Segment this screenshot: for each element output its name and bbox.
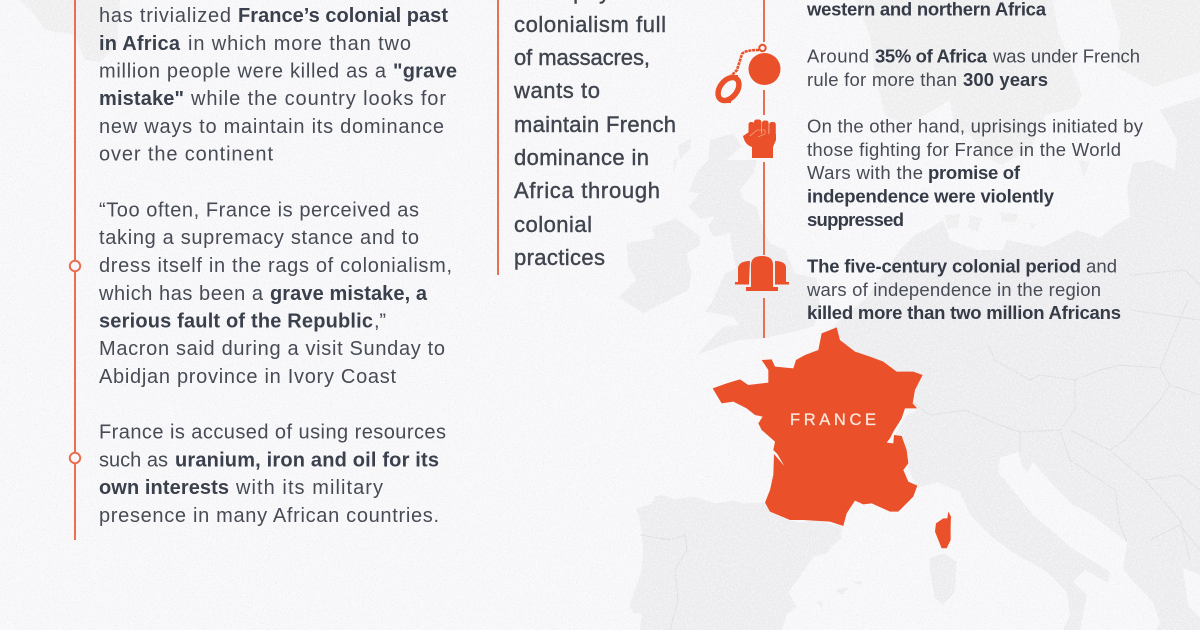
text block: death toll: wars of independence in the region xyxy=(806,279,1101,300)
text block: Macron trivialized colonial past: while the country looks for xyxy=(190,88,446,110)
text block: 35% of Africa: 35% of Africa xyxy=(875,46,988,66)
text block: death toll: killed more than two million Africans xyxy=(807,302,1121,323)
land: Great Britain xyxy=(688,133,820,355)
text block: suppressed uprisings: suppressed xyxy=(807,209,904,230)
text block: Macron trivialized colonial past: has trivialized xyxy=(99,5,231,27)
text block: Macron quote: taking a supremacy stance and to xyxy=(99,227,419,249)
text block: middle column statement: colonialism full xyxy=(514,12,666,37)
text block: Macron trivialized colonial past: in which more than two xyxy=(188,33,411,55)
land: Hebrides xyxy=(673,138,692,173)
text block: Macron quote: serious fault of the Republic xyxy=(99,310,373,332)
text block: Macron trivialized colonial past xyxy=(99,5,457,166)
land: Finland xyxy=(1110,0,1200,87)
timeline node xyxy=(70,453,80,463)
text block: suppressed uprisings xyxy=(807,116,1144,230)
text block: middle column statement: maintain French xyxy=(514,112,676,137)
text block: Macron quote: dress itself in the rags of colonialism, xyxy=(99,255,452,277)
text block: Macron trivialized colonial past: mistake" xyxy=(99,88,184,110)
text block: 35% of Africa: rule for more than xyxy=(807,69,957,90)
text block: suppressed uprisings: those fighting for France in the World xyxy=(807,139,1121,160)
timeline node xyxy=(70,261,80,271)
text block: Macron quote: which has been a xyxy=(98,283,264,305)
map: France highlighted xyxy=(713,327,951,548)
text block: middle column statement: of massacres, xyxy=(514,45,650,70)
text block: middle column statement: practices xyxy=(514,245,605,270)
text block: death toll: The five-century colonial period xyxy=(807,256,1081,276)
Lake Geneva and Swiss border gap xyxy=(885,407,918,444)
text block: resources and military presence: with its military xyxy=(235,477,383,499)
text block: Macron quote: “Too often, France is perceived as xyxy=(99,200,419,222)
text block: resources and military presence: uranium, iron and oil for its xyxy=(175,450,439,472)
text block: suppressed uprisings: independence were violently xyxy=(807,186,1055,206)
text block: 35% of Africa xyxy=(807,46,1140,90)
text block: middle column statement: Africa through xyxy=(514,178,660,203)
land: top-left landmass xyxy=(20,0,120,62)
text block: Macron trivialized colonial past: in Africa xyxy=(99,33,181,55)
text block: Macron quote: ,” xyxy=(374,310,386,332)
land: Iberia xyxy=(629,495,842,630)
text block: death toll xyxy=(806,256,1121,323)
map: Corsica xyxy=(935,512,951,548)
text block: Macron trivialized colonial past: new ways to maintain its dominance xyxy=(99,116,444,138)
text block: resources and military presence: France is accused of using resources xyxy=(99,422,446,444)
timeline: left column xyxy=(70,0,80,540)
text block: Macron quote xyxy=(98,200,452,388)
Aegean sea xyxy=(1183,568,1200,618)
timeline: right column segments xyxy=(763,0,765,338)
text block: Macron trivialized colonial past: over the continent xyxy=(99,144,273,166)
text block: middle column statement xyxy=(513,0,676,270)
text block: middle column statement: colonial xyxy=(514,212,592,237)
text block: 35% of Africa: was under French xyxy=(992,46,1140,66)
land: continental Europe xyxy=(833,97,1200,630)
icon: ball and chain xyxy=(714,45,780,104)
land: Ireland xyxy=(618,218,700,313)
text block: Macron quote: grave mistake, a xyxy=(270,283,428,305)
text block: resources and military presence: presence in many African countries. xyxy=(99,505,439,527)
text block: Macron trivialized colonial past: "grave xyxy=(393,60,457,82)
text block: middle column statement: wants to xyxy=(513,78,600,103)
land: Balearic islands xyxy=(817,582,862,608)
timeline: middle column xyxy=(497,0,499,275)
text block: Macron trivialized colonial past: million people were killed as a xyxy=(99,60,387,82)
text block: suppressed uprisings: promise of xyxy=(928,162,1021,183)
text block: Macron quote: Abidjan province in Ivory Coast xyxy=(99,366,396,388)
text block: middle column statement: dominance in xyxy=(514,145,649,170)
icon: gravestones xyxy=(735,256,789,291)
text block: death toll: and xyxy=(1086,256,1117,276)
land: Sardinia xyxy=(930,553,957,605)
text block: Macron trivialized colonial past: France’s colonial past xyxy=(238,5,448,27)
label: France: FRANCE xyxy=(790,411,876,429)
text block: suppressed uprisings: On the other hand, uprisings initiated by xyxy=(807,116,1144,136)
land: Scandinavia xyxy=(855,0,1082,165)
country borders xyxy=(640,270,1200,630)
land: Danish islands and Gotland xyxy=(945,160,1090,232)
icon: raised fist xyxy=(743,120,776,158)
text block: resources and military presence: own interests xyxy=(99,477,229,499)
text block: 35% of Africa: 300 years xyxy=(963,69,1048,90)
text block: Macron quote: Macron said during a visit Sunday to xyxy=(99,338,445,360)
text block: resources and military presence: such as xyxy=(99,450,168,472)
text block: 35% of Africa: Around xyxy=(807,46,869,66)
text block: suppressed uprisings: Wars with the xyxy=(807,162,923,183)
text block: resources and military presence xyxy=(99,422,446,527)
